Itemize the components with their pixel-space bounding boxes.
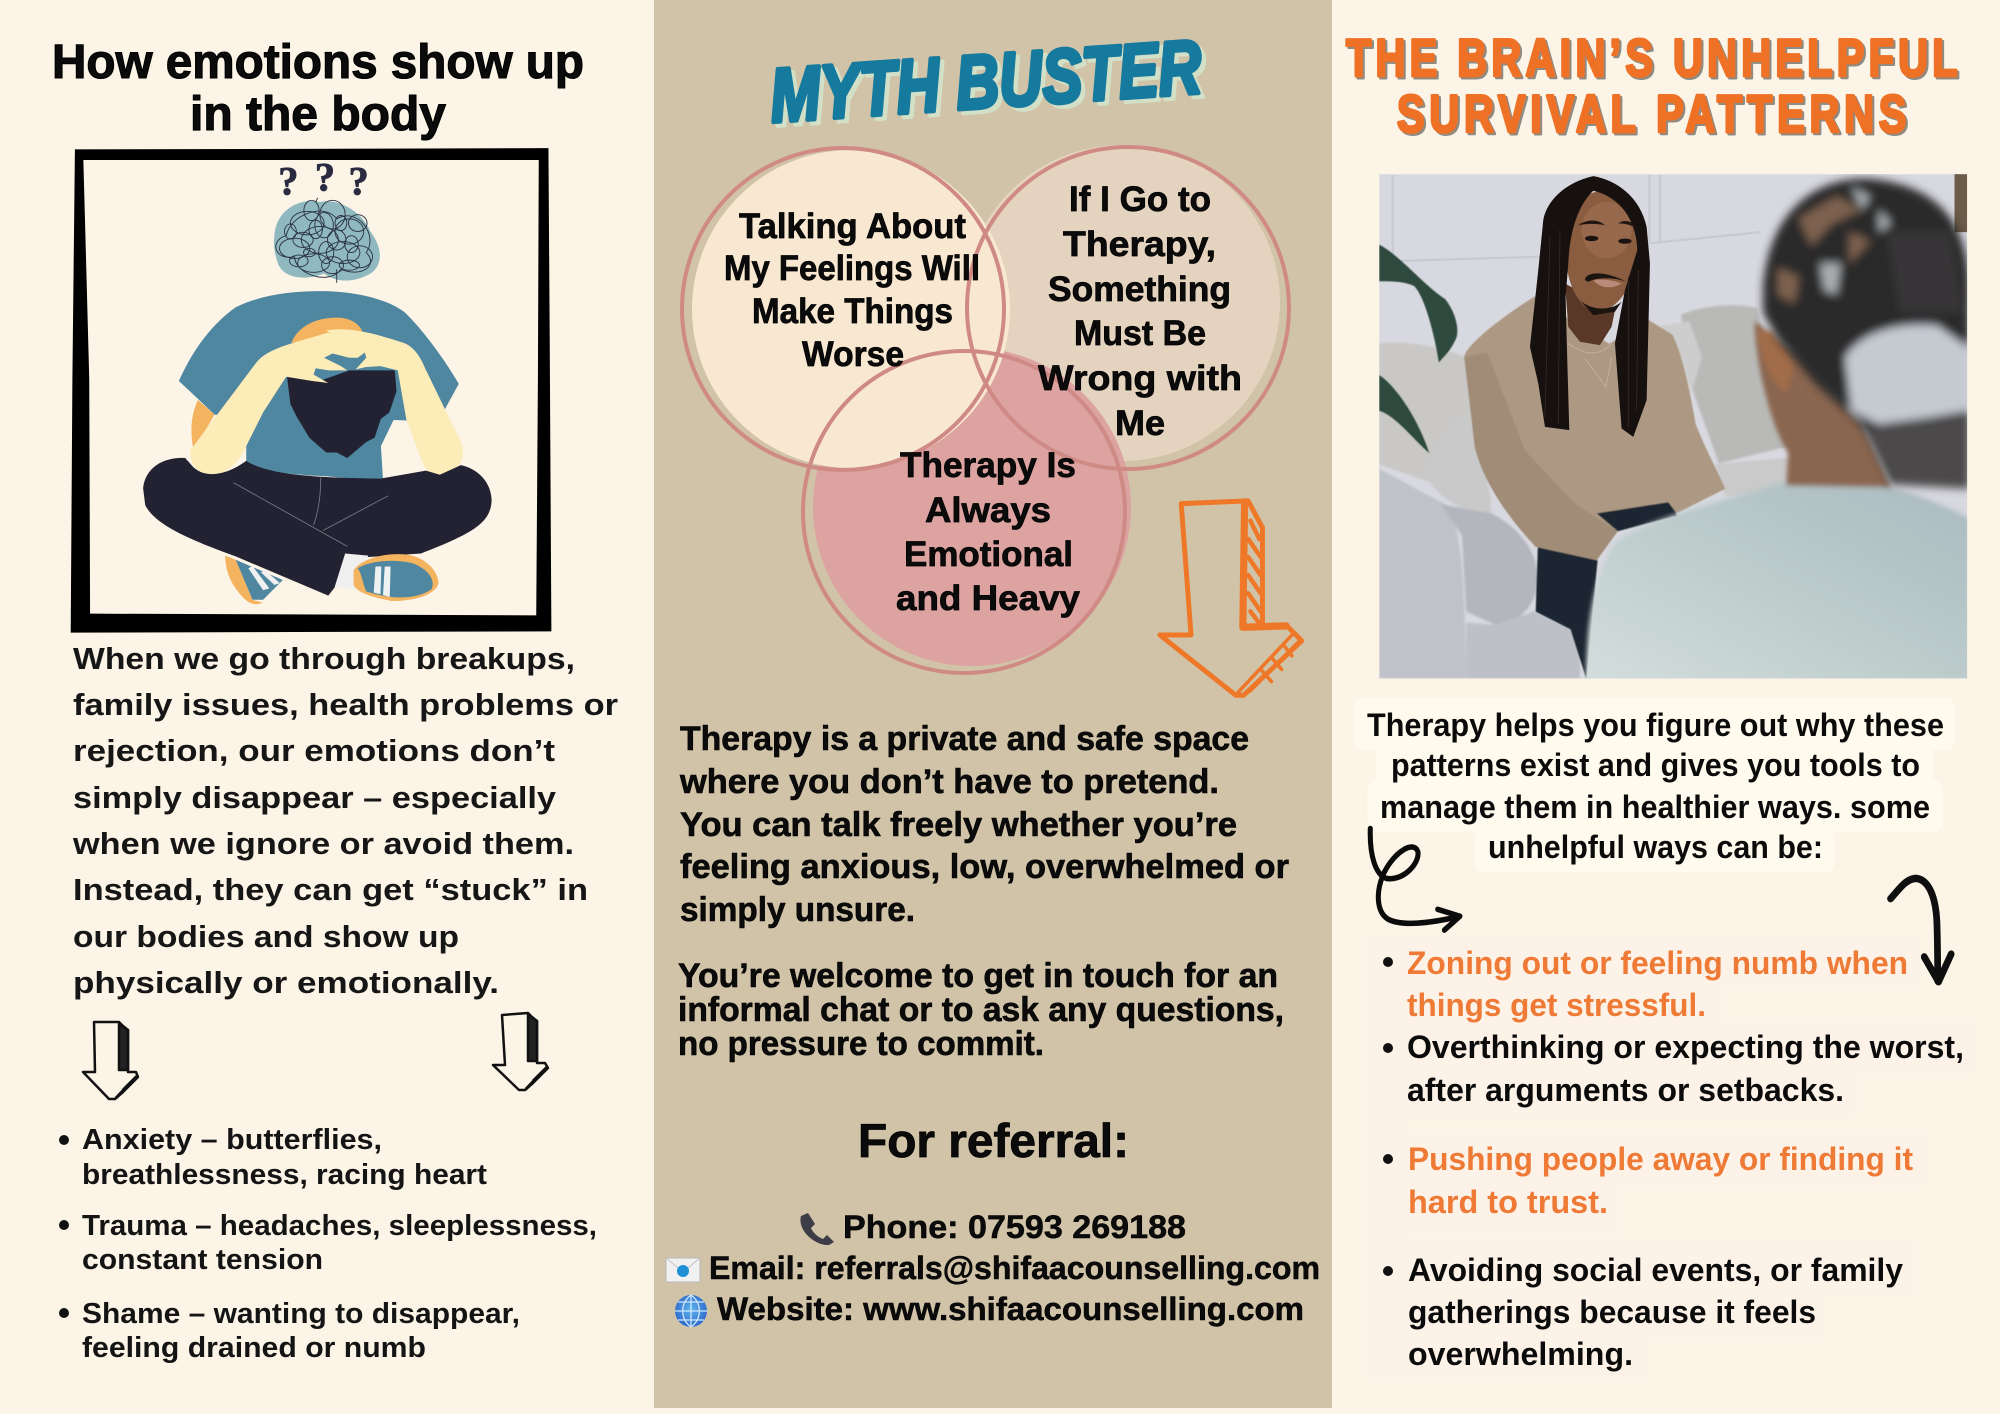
contact details: Phone: 07593 269188 [843, 1209, 1186, 1245]
unhelpful ways list: Zoning out or feeling numb when [1407, 945, 1908, 981]
question marks [278, 155, 369, 203]
symptom list: Trauma – headaches, sleeplessness, [82, 1210, 597, 1242]
text: therapy helps intro with highlight: unhelpful ways can be: [1488, 829, 1823, 865]
heading: for referral: For referral: [858, 1114, 1129, 1167]
myth: talking about feelings: Talking About [739, 207, 966, 246]
heading: how emotions show up: in the body [190, 88, 446, 141]
body paragraph: family issues, health problems or [73, 687, 618, 722]
tangled thought cloud [274, 198, 380, 283]
text: therapy is a safe space: feeling anxious, low, overwhelmed or [680, 848, 1289, 886]
myth: something must be wrong: If I Go to [1069, 180, 1211, 219]
illustration: framed person holding head [71, 148, 551, 633]
question marks: ? [278, 158, 298, 203]
arms and hands [190, 329, 463, 476]
icon: telephone [800, 1213, 834, 1245]
sofa [1379, 305, 1790, 679]
woman: hair and scrunchie [1763, 179, 1969, 489]
hair [287, 370, 396, 458]
myth: something must be wrong [1038, 180, 1242, 443]
myth: talking about feelings: My Feelings Will [724, 249, 980, 288]
text: therapy is a safe space: simply unsure. [680, 891, 915, 929]
text: therapy helps intro with highlight [1353, 698, 1955, 872]
myth: something must be wrong: Me [1115, 404, 1165, 443]
body paragraph [72, 641, 618, 1000]
body paragraph: rejection, our emotions don’t [73, 733, 555, 768]
heading: myth buster: MYTH BUSTER [767, 25, 1204, 139]
myth: always emotional [896, 446, 1081, 618]
myth: something must be wrong: Therapy, [1063, 225, 1216, 264]
panel: myth buster [654, 0, 1332, 1408]
myth: talking about feelings: Worse [802, 335, 904, 374]
text: therapy helps intro with highlight: patterns exist and gives you tools to [1391, 747, 1920, 783]
body paragraph: when we ignore or avoid them. [72, 826, 574, 861]
unhelpful ways list: hard to trust. [1408, 1184, 1608, 1220]
heading: how emotions show up [52, 36, 584, 141]
trouser fold lines [234, 478, 388, 546]
icon: globe [675, 1295, 707, 1327]
icon: looping arrow [1370, 829, 1460, 930]
panel: how emotions show up in the body [52, 36, 618, 1364]
question marks: ? [349, 158, 369, 203]
myth: something must be wrong: Must Be [1074, 314, 1206, 353]
symptom list: breathlessness, racing heart [82, 1159, 487, 1191]
heading: how emotions show up: How emotions show up [52, 36, 584, 89]
unhelpful ways list: after arguments or setbacks. [1407, 1072, 1844, 1108]
myth: always emotional: and Heavy [896, 579, 1081, 618]
icon: envelope [666, 1258, 700, 1282]
unhelpful ways list: Avoiding social events, or family [1408, 1252, 1903, 1288]
contact details: Website: www.shifaacounselling.com [717, 1291, 1304, 1327]
heading: survival patterns: SURVIVAL PATTERNS [1397, 85, 1906, 144]
myth: something must be wrong: Wrong with [1038, 359, 1242, 398]
body paragraph: When we go through breakups, [73, 641, 575, 676]
heading: survival patterns: THE BRAIN’S UNHELPFUL [1348, 31, 1960, 90]
text: therapy is a safe space: Therapy is a private and safe space [680, 720, 1249, 758]
brush frame [71, 148, 551, 633]
myth: something must be wrong: Something [1048, 270, 1231, 309]
text: therapy helps intro with highlight: Therapy helps you figure out why these [1367, 707, 1944, 743]
body paragraph: our bodies and show up [73, 919, 459, 954]
symptom list: feeling drained or numb [82, 1332, 426, 1364]
orange shadow shapes [191, 317, 364, 450]
photo: therapy conversation [1379, 174, 1969, 681]
text: informal chat invitation: no pressure to commit. [678, 1025, 1044, 1063]
icon: hooked arrow [1891, 878, 1951, 982]
blue t-shirt [179, 291, 459, 480]
contact details: Email: referrals@shifaacounselling.com [709, 1250, 1320, 1286]
body paragraph: simply disappear – especially [73, 780, 557, 815]
text: therapy is a safe space [679, 720, 1289, 929]
symptom list: Anxiety – butterflies, [82, 1124, 382, 1156]
contact details [666, 1209, 1320, 1327]
heading: myth buster: MYTH BUSTER [772, 28, 1209, 143]
man: head and hair [1530, 176, 1650, 437]
unhelpful ways list [1365, 935, 1976, 1380]
text: therapy is a safe space: where you don’t have to pretend. [679, 763, 1219, 801]
heading: survival patterns: SURVIVAL PATTERNS [1399, 87, 1908, 146]
icon: right sketch arrow [493, 1013, 548, 1090]
right shoe and sock [335, 553, 439, 601]
plant [1379, 245, 1457, 453]
heading: survival patterns: THE BRAIN’S UNHELPFUL [1346, 29, 1958, 88]
panel background [654, 0, 1332, 1408]
myth: talking about feelings [724, 207, 980, 374]
unhelpful ways list: things get stressful. [1407, 987, 1706, 1023]
text: informal chat invitation [678, 957, 1284, 1063]
heading: survival patterns [1346, 29, 1960, 146]
symptom list [59, 1124, 597, 1364]
unhelpful ways list: Pushing people away or finding it [1408, 1141, 1913, 1177]
dark trousers [143, 458, 492, 596]
symptom list: Shame – wanting to disappear, [82, 1298, 520, 1330]
left shoe [225, 556, 283, 604]
unhelpful ways list: gatherings because it feels [1408, 1294, 1816, 1330]
myth: always emotional: Always [925, 491, 1051, 530]
woman: back and neck [1586, 321, 1969, 681]
icon: orange sketch arrow [1160, 501, 1302, 695]
text: therapy helps intro with highlight: manage them in healthier ways. some [1380, 789, 1930, 825]
unhelpful ways list: Overthinking or expecting the worst, [1407, 1029, 1964, 1065]
text: therapy is a safe space: You can talk freely whether you’re [680, 806, 1237, 844]
body paragraph: physically or emotionally. [73, 965, 499, 1000]
head top orange [291, 318, 363, 343]
body paragraph: Instead, they can get “stuck” in [73, 872, 588, 907]
text: informal chat invitation: informal chat or to ask any questions, [678, 991, 1284, 1029]
myth: always emotional: Emotional [904, 535, 1073, 574]
panel: brain's unhelpful survival patterns [1346, 29, 1976, 1380]
icon: left sketch arrow [83, 1022, 138, 1099]
symptom list: constant tension [82, 1244, 323, 1276]
venn diagram: three myths [682, 145, 1289, 673]
unhelpful ways list: overwhelming. [1408, 1336, 1633, 1372]
question marks: ? [315, 155, 335, 200]
myth: always emotional: Therapy Is [900, 446, 1076, 485]
text: informal chat invitation: You’re welcome to get in touch for an [678, 957, 1278, 995]
myth: talking about feelings: Make Things [752, 292, 953, 331]
man: jumper and trousers [1464, 295, 1725, 679]
